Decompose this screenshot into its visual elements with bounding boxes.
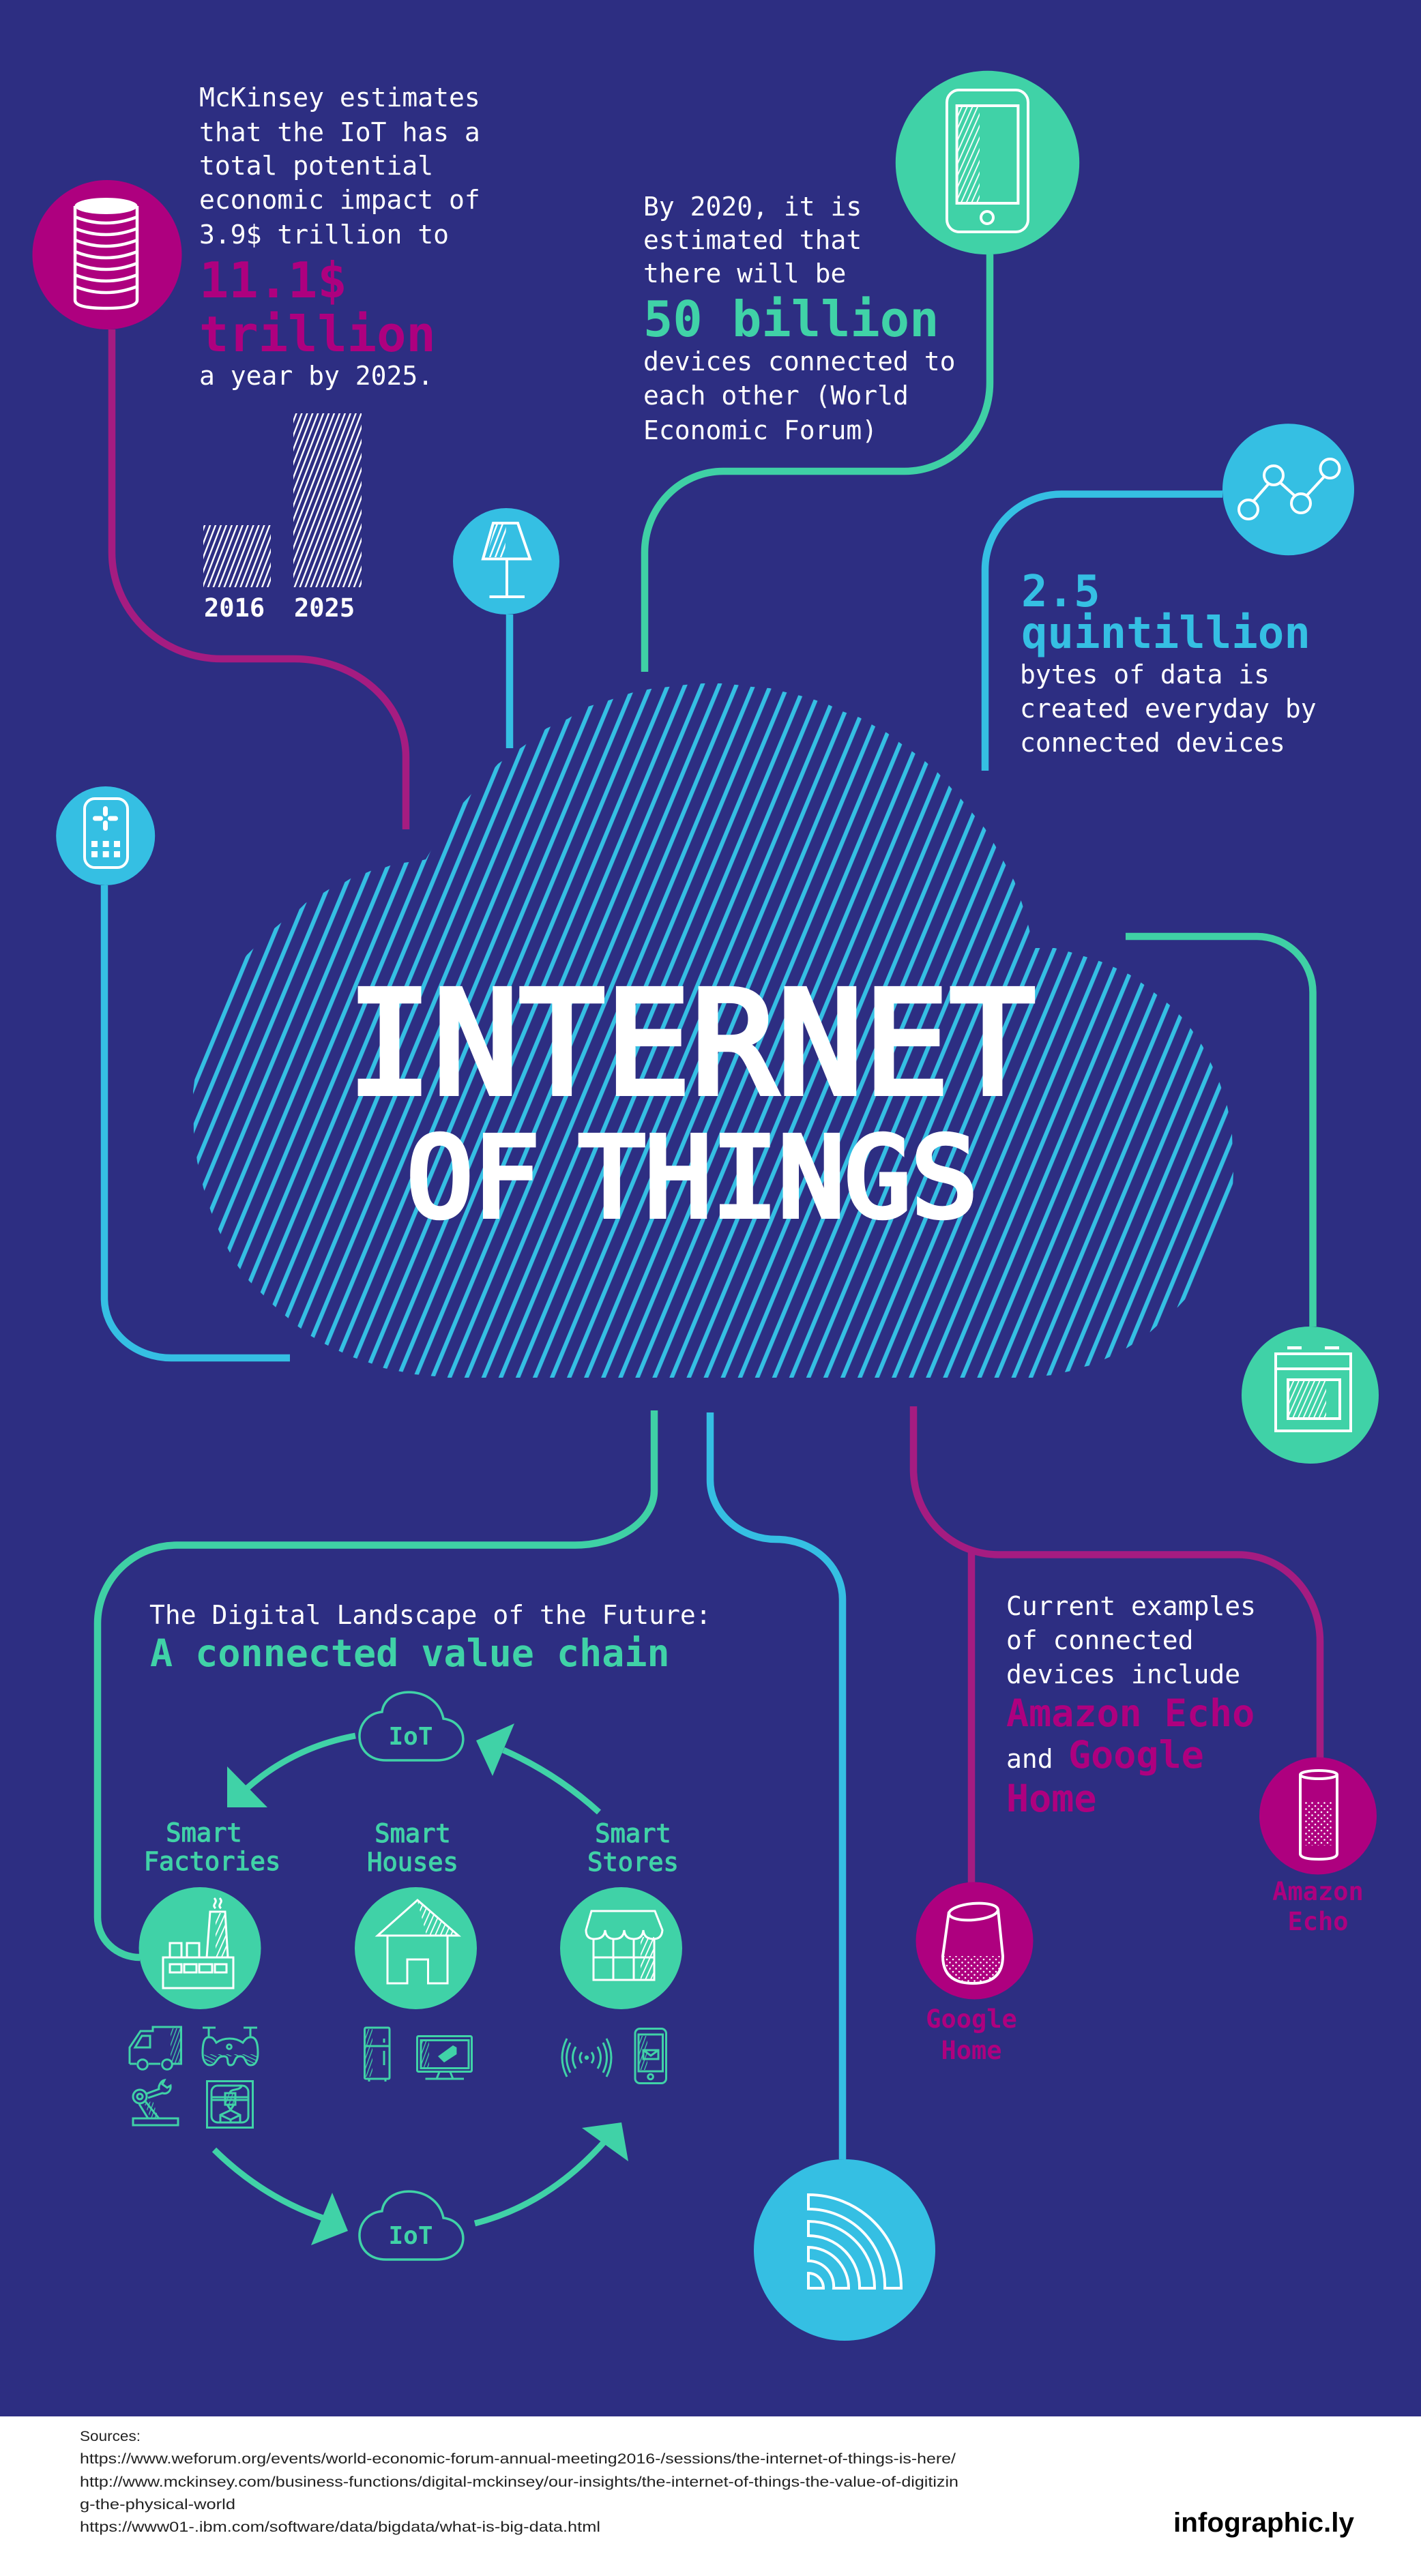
sources: Sources: xyxy=(80,2429,141,2444)
label: smart stores: Smart xyxy=(595,1819,671,1848)
label: smart houses xyxy=(367,1819,458,1877)
text: 2.5 quintillion: connected devices xyxy=(1020,728,1285,758)
icon: 3D printer xyxy=(207,2082,252,2128)
text: McKinsey estimate: 11.1$ xyxy=(199,252,347,309)
text: McKinsey estimate: 3.9$ trillion to xyxy=(199,220,449,250)
cloud: striped xyxy=(193,683,1233,1378)
icon: coins xyxy=(33,180,181,329)
text: 50 billion: Economic Forum) xyxy=(643,415,877,445)
text: 2.5 quintillion: quintillion xyxy=(1021,608,1310,659)
text: McKinsey estimate: McKinsey estimates xyxy=(199,83,480,113)
text: McKinsey estimate: trillion xyxy=(199,306,436,363)
text: McKinsey estimate: economic impact of xyxy=(199,185,480,215)
text: 2.5 quintillion: created everyday by xyxy=(1020,694,1317,724)
footer xyxy=(0,2416,1421,2576)
logo: infographic.ly xyxy=(1173,2508,1355,2538)
label: smart houses: Smart xyxy=(375,1819,451,1848)
label: smart stores: Stores xyxy=(587,1848,679,1877)
text: current examples: Google xyxy=(1068,1733,1204,1777)
text: McKinsey estimate: that the IoT has a xyxy=(199,117,480,147)
label: smart factories: Factories xyxy=(144,1847,280,1876)
title xyxy=(347,960,1036,1243)
sources: g-the-physical-world xyxy=(80,2497,235,2513)
icon: remote control xyxy=(56,786,155,885)
text: 50 billion xyxy=(643,192,956,445)
title: OF xyxy=(407,1114,540,1243)
label: smart factories xyxy=(144,1818,280,1876)
icon: truck xyxy=(130,2027,181,2069)
icon: wireless signal xyxy=(562,2039,611,2077)
connector: cloud to wifi xyxy=(710,1412,843,2159)
icon: IoT cloud bottom: IoT xyxy=(388,2222,433,2250)
text: current examples: and xyxy=(1006,1744,1053,1774)
heading: connected value chain: The Digital Landscape of the Future: xyxy=(149,1600,712,1630)
text: McKinsey estimate xyxy=(199,83,480,391)
bar chart: 2016 vs 2025: 2025 xyxy=(294,593,355,623)
icon: store xyxy=(560,1887,682,2009)
text: 2.5 quintillion: bytes of data is xyxy=(1020,660,1270,690)
icon: IoT cloud top: IoT xyxy=(388,1723,433,1751)
label: smart factories: Smart xyxy=(166,1818,242,1848)
connector: remote to cloud xyxy=(104,885,290,1358)
connector: cloud to amazon echo xyxy=(913,1406,1320,1758)
heading: connected value chain xyxy=(149,1600,712,1675)
text: 2.5 quintillion xyxy=(1020,567,1317,758)
label: smart houses: Houses xyxy=(367,1848,458,1877)
label: google home xyxy=(926,2004,1017,2065)
text: 50 billion: 50 billion xyxy=(643,291,939,348)
connector: data graph to cloud xyxy=(985,494,1222,771)
arrow: IoT to factories xyxy=(227,1736,355,1807)
bar chart: 2016 vs 2025 xyxy=(203,413,362,623)
text: 50 billion: By 2020, it is xyxy=(643,192,862,222)
label: google home: Google xyxy=(926,2004,1017,2034)
arrow: IoT to stores xyxy=(475,2122,628,2223)
icon: factory xyxy=(139,1887,261,2009)
text: 2.5 quintillion: 2.5 xyxy=(1021,567,1100,617)
sources: http://www.mckinsey.com/business-functions/digital-mckinsey/our-insights/the-internet-of-things-the-value-of-digitizin xyxy=(80,2474,958,2490)
connector: coins to cloud xyxy=(112,329,406,829)
text: McKinsey estimate: a year by 2025. xyxy=(199,361,433,391)
sources: https://www.weforum.org/events/world-economic-forum-annual-meeting2016-/sessions/the-internet-of-things-is-here/ xyxy=(80,2451,956,2467)
heading: connected value chain: A connected value chain xyxy=(150,1631,670,1675)
icon: small phone xyxy=(635,2028,666,2083)
icon: monitor xyxy=(417,2037,472,2079)
icon: lamp xyxy=(453,508,559,615)
text: current examples: of connected xyxy=(1006,1625,1194,1655)
sources xyxy=(80,2429,958,2535)
connector: lamp to cloud xyxy=(506,615,513,748)
text: McKinsey estimate: total potential xyxy=(199,151,433,181)
connector: branch to google home xyxy=(968,1548,975,1882)
icon: wifi xyxy=(754,2159,935,2341)
label: amazon echo: Echo xyxy=(1287,1907,1349,1936)
bar chart: 2016 vs 2025: 2016 xyxy=(204,593,265,623)
text: 50 billion: estimated that xyxy=(643,225,862,255)
text: current examples: Home xyxy=(1006,1777,1096,1820)
connector: phone to cloud xyxy=(645,254,990,672)
text: current examples: Amazon Echo xyxy=(1006,1691,1255,1735)
text: 50 billion: there will be xyxy=(643,258,846,288)
connector: cloud to oven xyxy=(1126,936,1313,1327)
text: current examples xyxy=(1006,1591,1256,1820)
icon: oven xyxy=(1242,1327,1379,1464)
text: 50 billion: devices connected to xyxy=(643,346,956,376)
label: amazon echo: Amazon xyxy=(1272,1877,1364,1906)
icon: IoT cloud bottom xyxy=(360,2191,463,2260)
icon: fridge xyxy=(364,2028,390,2082)
sources: https://www01-.ibm.com/software/data/bigdata/what-is-big-data.html xyxy=(80,2519,600,2535)
icon: IoT cloud top xyxy=(360,1692,463,1760)
text: current examples: Current examples xyxy=(1006,1591,1256,1621)
label: google home: Home xyxy=(941,2036,1002,2065)
icon: phone xyxy=(896,71,1079,254)
connector: cloud to smart factories xyxy=(98,1410,654,1957)
icon: house xyxy=(355,1887,477,2009)
icon: drone xyxy=(203,2028,258,2065)
icon: amazon echo xyxy=(1259,1757,1377,1874)
text: 50 billion: each other (World xyxy=(643,381,909,411)
text: current examples: devices include xyxy=(1006,1659,1240,1689)
arrow: factories to IoT xyxy=(214,2150,348,2245)
title: THINGS xyxy=(578,1114,978,1243)
arrow: stores to IoT xyxy=(476,1723,599,1812)
icon: robot arm xyxy=(133,2080,178,2125)
icon: google home xyxy=(915,1882,1033,2000)
title: INTERNET xyxy=(347,960,1036,1127)
label: smart stores xyxy=(587,1819,679,1877)
icon: line graph xyxy=(1222,424,1354,555)
label: amazon echo xyxy=(1272,1877,1364,1936)
